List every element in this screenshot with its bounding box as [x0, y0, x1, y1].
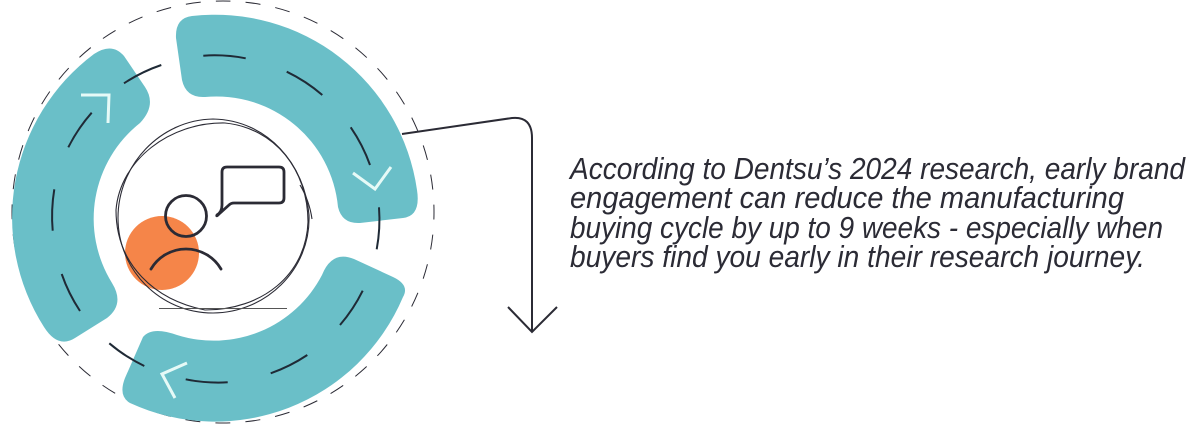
- icon: person: [151, 196, 221, 269]
- cycle segment: bottom: [122, 257, 405, 422]
- sketched circle: [116, 119, 312, 313]
- cycle segment: top right: [176, 15, 418, 223]
- icon: speech bubble: [217, 167, 284, 216]
- dashed middle ring: [52, 55, 379, 383]
- outer dashed circle: [12, 1, 434, 423]
- text block: research statement: buyers find you early in their research journey.: [570, 239, 1145, 274]
- arrow: leader line from cycle to text: [402, 118, 557, 332]
- ground line: [159, 308, 287, 310]
- cycle segment: left: [12, 48, 150, 342]
- icon: chevrons on cycle: [81, 95, 391, 398]
- icon: orange circle: [125, 216, 199, 290]
- text block: research statement: engagement can reduce the manufacturing: [570, 180, 1124, 215]
- text block: research statement: [568, 151, 1187, 274]
